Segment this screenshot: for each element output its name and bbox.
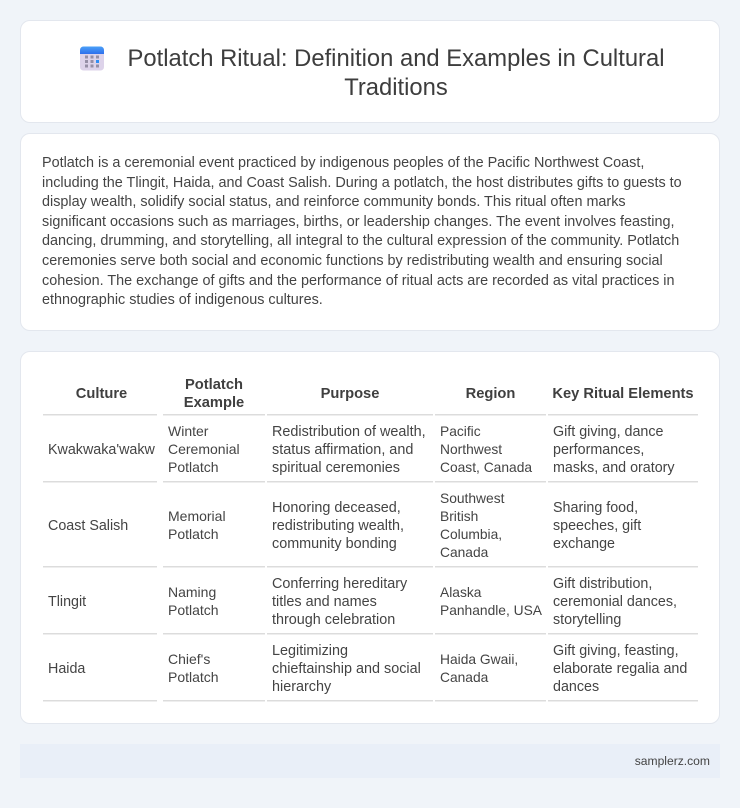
row: Kwakwaka'wakw: Ceremonial — [168, 441, 240, 457]
row: Kwakwaka'wakw: status affirmation, and — [272, 442, 413, 458]
table header row: Region — [466, 386, 515, 402]
title: Potlatch Ritual: Definition and Examples in Cultural — [127, 45, 665, 72]
table header row: Example — [184, 395, 244, 411]
description text — [42, 155, 682, 308]
row: Tlingit: Alaska — [440, 585, 481, 600]
description text: display wealth, solidify social status, and reinforce community bonds. This ritual often marks — [42, 194, 626, 210]
row: Kwakwaka'wakw: Kwakwaka'wakw — [48, 442, 155, 458]
row: Coast Salish: Canada — [440, 545, 488, 560]
row: Haida: Canada — [440, 670, 488, 685]
row: Kwakwaka'wakw: Gift giving, dance — [553, 424, 663, 440]
row: Tlingit: Tlingit — [48, 594, 86, 610]
description text: cohesion. The exchange of gifts and the performance of ritual acts are recorded as vital practices in — [42, 273, 674, 289]
row: Coast Salish: Memorial — [168, 508, 226, 524]
row: Tlingit: Panhandle, USA — [440, 603, 542, 618]
table header row: Culture — [76, 386, 127, 402]
row: Haida: Haida Gwaii, — [440, 652, 518, 667]
row: Coast Salish: Potlatch — [168, 526, 219, 542]
description text: significant occasions such as marriages, births, or leadership changes. The event involves feasting, — [42, 214, 674, 230]
row: Haida — [48, 643, 687, 695]
row: Haida: hierarchy — [272, 679, 331, 695]
row: Coast Salish: British — [440, 509, 478, 524]
description text: Potlatch is a ceremonial event practiced by indigenous peoples of the Pacific Northwest Coast, — [42, 155, 644, 171]
description text: dancing, drumming, and storytelling, all integral to the cultural expression of the community. Potlatch — [42, 233, 679, 249]
row: Tlingit: titles and names — [272, 594, 377, 610]
row: Kwakwaka'wakw: Pacific — [440, 424, 481, 439]
panel: table — [20, 351, 720, 724]
row: Haida: Haida — [48, 661, 85, 677]
row: Coast Salish: exchange — [553, 536, 615, 552]
row: Kwakwaka'wakw: Redistribution of wealth, — [272, 424, 426, 440]
row: Haida: Potlatch — [168, 669, 219, 685]
row: Tlingit: ceremonial dances, — [553, 594, 677, 610]
row: Coast Salish: redistributing wealth, — [272, 518, 404, 534]
table header row — [76, 377, 694, 411]
row: Coast Salish — [48, 491, 642, 560]
row: Tlingit: Conferring hereditary — [272, 576, 407, 592]
table header row: Key Ritual Elements — [552, 386, 694, 402]
row: Tlingit: Gift distribution, — [553, 576, 652, 592]
row: Tlingit: through celebration — [272, 612, 395, 628]
row: Tlingit: storytelling — [553, 612, 621, 628]
footer bar — [20, 744, 720, 778]
panel: description paragraph — [20, 133, 720, 331]
row: Kwakwaka'wakw: Coast, Canada — [440, 460, 532, 475]
row: Coast Salish: Southwest — [440, 491, 504, 506]
description text: ethnographic studies of indigenous cultures. — [42, 292, 323, 308]
description text: ceremonies serve both social and economic functions by redistributing wealth and ensuring social — [42, 253, 663, 269]
row: Kwakwaka'wakw — [48, 423, 675, 476]
title: Traditions — [344, 74, 448, 101]
row: Tlingit: Potlatch — [168, 602, 219, 618]
row: Coast Salish: Columbia, — [440, 527, 502, 542]
row: Kwakwaka'wakw: spiritual ceremonies — [272, 460, 400, 476]
row: Haida: elaborate regalia and — [553, 661, 687, 677]
header panel — [20, 20, 720, 123]
row: Tlingit — [48, 576, 677, 628]
table header row: Purpose — [321, 386, 379, 402]
row: Coast Salish: Coast Salish — [48, 518, 128, 534]
row: Kwakwaka'wakw: performances, — [553, 442, 644, 458]
row: Haida: chieftainship and social — [272, 661, 421, 677]
row: Coast Salish: speeches, gift — [553, 518, 641, 534]
row: Kwakwaka'wakw: Northwest — [440, 442, 502, 457]
row: Kwakwaka'wakw: Winter — [168, 423, 208, 439]
row: Coast Salish: Honoring deceased, — [272, 500, 401, 516]
row: Kwakwaka'wakw: masks, and oratory — [553, 460, 675, 476]
row: Kwakwaka'wakw: Potlatch — [168, 459, 219, 475]
icon: calendar — [80, 46, 104, 70]
row: Tlingit: Naming — [168, 584, 216, 600]
title — [127, 45, 665, 101]
row: Haida: Legitimizing — [272, 643, 348, 659]
row: Haida: dances — [553, 679, 599, 695]
row: Coast Salish: community bonding — [272, 536, 397, 552]
row: Coast Salish: Sharing food, — [553, 500, 638, 516]
row: Haida: Gift giving, feasting, — [553, 643, 679, 659]
table header row: Potlatch — [185, 377, 243, 393]
table — [43, 377, 698, 702]
description text: including the Tlingit, Haida, and Coast Salish. During a potlatch, the host distributes gifts to guests to — [42, 175, 682, 191]
footer source text: samplerz.com — [635, 754, 710, 768]
row: Haida: Chief's — [168, 651, 210, 667]
